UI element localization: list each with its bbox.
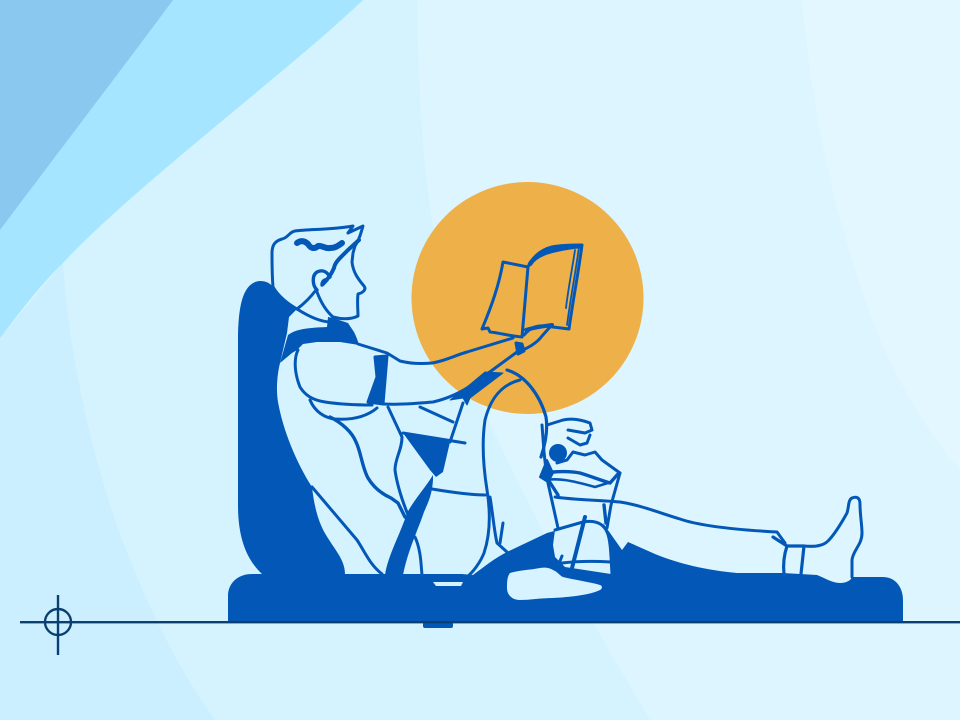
ear <box>313 271 330 290</box>
torso fold line <box>330 417 405 517</box>
bucket left side <box>542 425 558 528</box>
floor cushion and lower leg silhouette <box>228 523 903 622</box>
dark triangle on torso <box>403 433 450 477</box>
foot on cushion <box>507 568 602 600</box>
man line art <box>272 226 862 577</box>
upper leg top line <box>555 497 785 543</box>
ground line <box>20 621 960 623</box>
book left page <box>482 262 528 337</box>
bucket knot <box>540 460 553 482</box>
reading arm upper line <box>358 338 513 364</box>
knee outer arc <box>507 370 547 457</box>
book right page <box>524 245 582 335</box>
foot <box>804 497 862 577</box>
crosshair marker <box>45 595 71 655</box>
backrest cushion <box>238 281 345 574</box>
bucket second rim line <box>546 479 611 487</box>
neck line behind ear <box>297 290 316 309</box>
cushion foot tab <box>423 622 453 628</box>
inner leg small curve <box>415 537 422 575</box>
shoulder sleeve <box>295 350 372 405</box>
jaw and collar line <box>273 287 331 322</box>
hand on popcorn <box>547 419 592 445</box>
knee inner arc and thigh <box>467 380 520 577</box>
sock cuff <box>773 537 804 574</box>
bucket thick rim <box>553 472 618 483</box>
forearm thick wedge <box>450 372 503 405</box>
torso vertical line <box>388 407 408 515</box>
bucket right side <box>607 473 620 528</box>
sun circle <box>412 182 644 414</box>
shin light shape <box>553 522 611 574</box>
thigh second line <box>490 497 507 552</box>
hair wave <box>297 241 342 248</box>
head and face outline <box>272 226 365 319</box>
neck and shoulder band <box>280 317 359 363</box>
popcorn blob <box>549 444 567 462</box>
shin straps <box>572 517 585 568</box>
torso side curve <box>310 400 377 419</box>
light sliver under thigh <box>433 582 463 586</box>
back line <box>312 487 382 574</box>
reading arm lower line <box>383 327 550 404</box>
sleeve band <box>368 356 387 404</box>
bucket rim and contents <box>557 452 620 473</box>
shirt lines <box>403 403 465 443</box>
strap: dark thigh shape <box>385 475 433 575</box>
book page edges <box>566 247 579 325</box>
shin outline <box>555 521 612 574</box>
hair front <box>323 240 359 284</box>
wrist knot <box>516 343 524 354</box>
waist line <box>432 489 485 495</box>
book bottom thick edge <box>526 325 552 330</box>
